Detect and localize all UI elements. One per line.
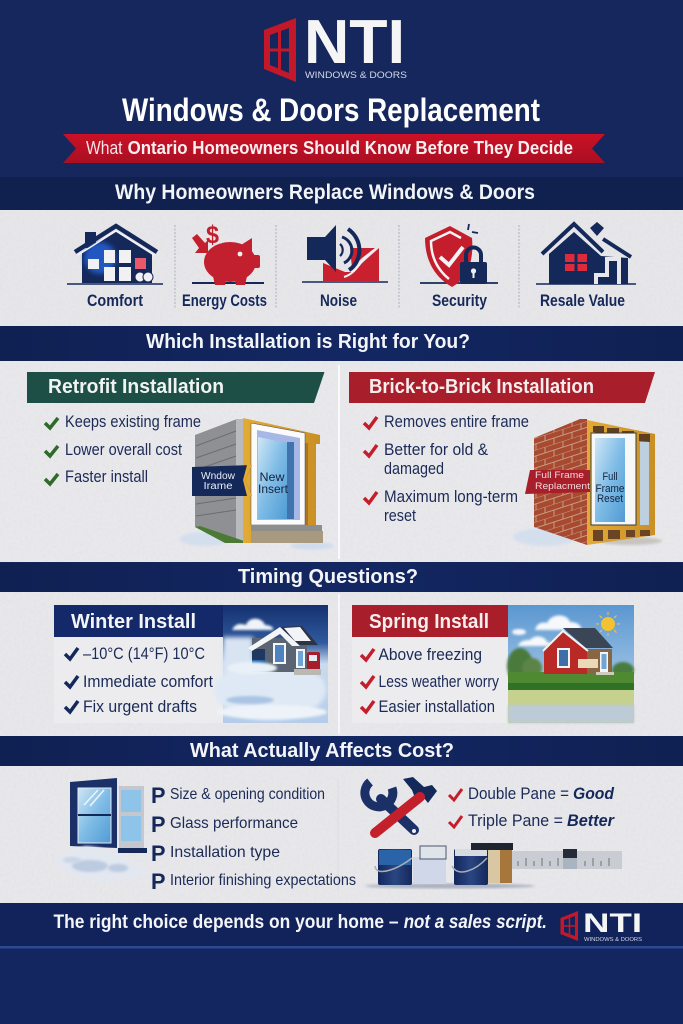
checklist: brick-to-brick: reset bbox=[384, 507, 416, 525]
logo: NTI Windows & Doors: WINDOWS & DOORS bbox=[305, 70, 407, 80]
illustration: retrofit window cutaway: Insert bbox=[258, 482, 289, 496]
card: winter install bbox=[54, 605, 328, 723]
illustration: snowy window bbox=[55, 778, 148, 881]
checklist: cost factors: P bbox=[151, 869, 166, 894]
checklist: cost factors: Glass performance bbox=[170, 815, 298, 832]
checklist: spring: Less weather worry bbox=[378, 673, 500, 691]
callout: window frame: Wndow bbox=[201, 471, 236, 482]
callout: full frame replacement: Replacment bbox=[535, 481, 590, 492]
list: pane comparison bbox=[449, 784, 615, 830]
label: full frame reset: Full bbox=[602, 471, 618, 483]
logo: NTI Windows & Doors bbox=[264, 8, 407, 82]
label: comfort: Comfort bbox=[87, 292, 143, 310]
icon: security shield and lock bbox=[420, 224, 498, 287]
icon: energy costs piggy bank: $ bbox=[206, 221, 219, 249]
checklist: winter: Fix urgent drafts bbox=[83, 698, 197, 716]
checklist: cost factors: P bbox=[151, 841, 166, 866]
icon: comfort house bbox=[67, 226, 163, 284]
illustration: retrofit window cutaway bbox=[179, 418, 334, 550]
logo: footer NTI: NTI bbox=[583, 908, 642, 938]
label: resale value: Resale Value bbox=[540, 292, 625, 310]
illustration: brick opening cutaway: Reset bbox=[597, 493, 623, 505]
callout: full frame replacement: Full Frame bbox=[535, 470, 584, 481]
list: pane comparison: Triple Pane = bbox=[468, 811, 563, 830]
section heading: which installation bbox=[0, 326, 683, 361]
logo: footer NTI bbox=[560, 908, 642, 943]
subtitle ribbon: Ontario Homeowners Should Know Before They Decide bbox=[128, 138, 573, 158]
heading: spring install: Spring Install bbox=[369, 610, 489, 633]
panel: reasons bbox=[0, 210, 683, 326]
icon: energy costs piggy bank bbox=[192, 221, 264, 285]
section heading: why homeowners replace bbox=[0, 177, 683, 210]
checklist: retrofit: Faster install bbox=[65, 468, 148, 486]
heading: winter install: Winter Install bbox=[71, 610, 196, 633]
footer strip bbox=[0, 903, 683, 948]
subtitle ribbon: What bbox=[86, 138, 122, 158]
checklist: retrofit bbox=[45, 413, 201, 486]
checklist: cost factors: Size & opening condition bbox=[170, 786, 325, 803]
callout: window frame bbox=[192, 465, 252, 496]
checklist: brick-to-brick: Maximum long-term bbox=[384, 488, 518, 506]
label: noise: Noise bbox=[320, 292, 357, 310]
callout: window frame: Irame bbox=[204, 481, 233, 492]
checklist: retrofit: Keeps existing frame bbox=[65, 413, 201, 431]
checklist: cost factors: Interior finishing expectations bbox=[170, 872, 356, 889]
list: pane comparison: Good bbox=[573, 784, 615, 803]
section heading: which installation: Which Installation is Right for You? bbox=[146, 330, 470, 353]
logo: footer NTI: WINDOWS & DOORS bbox=[584, 937, 642, 943]
logo: NTI Windows & Doors: NTI bbox=[304, 8, 405, 77]
heading: brick-to-brick bbox=[349, 372, 655, 403]
icon: resale value house bbox=[536, 222, 636, 284]
checklist: brick-to-brick: Removes entire frame bbox=[384, 413, 529, 431]
callout: full frame replacement bbox=[525, 470, 590, 494]
panel: cost factors bbox=[0, 766, 683, 903]
checklist: cost factors bbox=[151, 783, 356, 894]
checklist: spring bbox=[361, 646, 500, 716]
checklist: winter bbox=[65, 645, 213, 716]
checklist: winter: –10°C (14°F) 10°C bbox=[83, 645, 205, 663]
label: new insert: New bbox=[260, 470, 285, 484]
section heading: why homeowners replace: Why Homeowners Replace Windows & Doors bbox=[115, 181, 535, 204]
checklist: cost factors: P bbox=[151, 812, 166, 837]
checklist: spring: Above freezing bbox=[378, 646, 482, 664]
illustration: brick opening cutaway: Frame bbox=[596, 483, 624, 495]
heading: winter install bbox=[54, 605, 223, 637]
illustration: brick opening cutaway bbox=[513, 419, 662, 546]
panel: timing bbox=[0, 592, 683, 736]
checklist: winter: Immediate comfort bbox=[83, 673, 213, 691]
card: spring install bbox=[352, 605, 634, 723]
checklist: spring: Easier installation bbox=[378, 698, 495, 716]
list: pane comparison: Double Pane = bbox=[468, 784, 569, 803]
checklist: brick-to-brick bbox=[364, 413, 529, 525]
section heading: cost bbox=[0, 736, 683, 766]
panel: brick-to-brick installation bbox=[349, 372, 662, 546]
illustration: paint cans and tape measure bbox=[365, 843, 622, 888]
section heading: timing bbox=[0, 563, 683, 592]
heading: retrofit bbox=[27, 372, 324, 403]
icon: wrench and hammer bbox=[365, 777, 437, 833]
heading: spring install bbox=[352, 605, 508, 637]
panel: installation types bbox=[0, 361, 683, 562]
icon: noise speaker bbox=[302, 225, 388, 282]
section heading: timing: Timing Questions? bbox=[238, 565, 418, 588]
subtitle ribbon bbox=[63, 134, 605, 163]
checklist: retrofit: Lower overall cost bbox=[65, 441, 182, 459]
tagline: The right choice depends on your home – bbox=[54, 912, 398, 933]
tagline: not a sales script. bbox=[404, 912, 547, 933]
heading: retrofit: Retrofit Installation bbox=[48, 375, 224, 398]
illustration: spring house bbox=[507, 605, 634, 723]
checklist: brick-to-brick: damaged bbox=[384, 460, 444, 478]
illustration: winter house bbox=[214, 605, 328, 723]
label: security: Security bbox=[432, 292, 488, 310]
panel: retrofit installation bbox=[27, 372, 334, 550]
checklist: cost factors: P bbox=[151, 783, 166, 808]
title: Windows & Doors Replacement bbox=[122, 92, 540, 128]
checklist: brick-to-brick: Better for old & bbox=[384, 441, 488, 459]
label: energy costs: Energy Costs bbox=[182, 292, 267, 310]
checklist: cost factors: Installation type bbox=[170, 844, 280, 861]
list: pane comparison: Better bbox=[567, 811, 615, 830]
heading: brick-to-brick: Brick-to-Brick Installation bbox=[369, 375, 594, 398]
section heading: cost: What Actually Affects Cost? bbox=[190, 739, 454, 762]
